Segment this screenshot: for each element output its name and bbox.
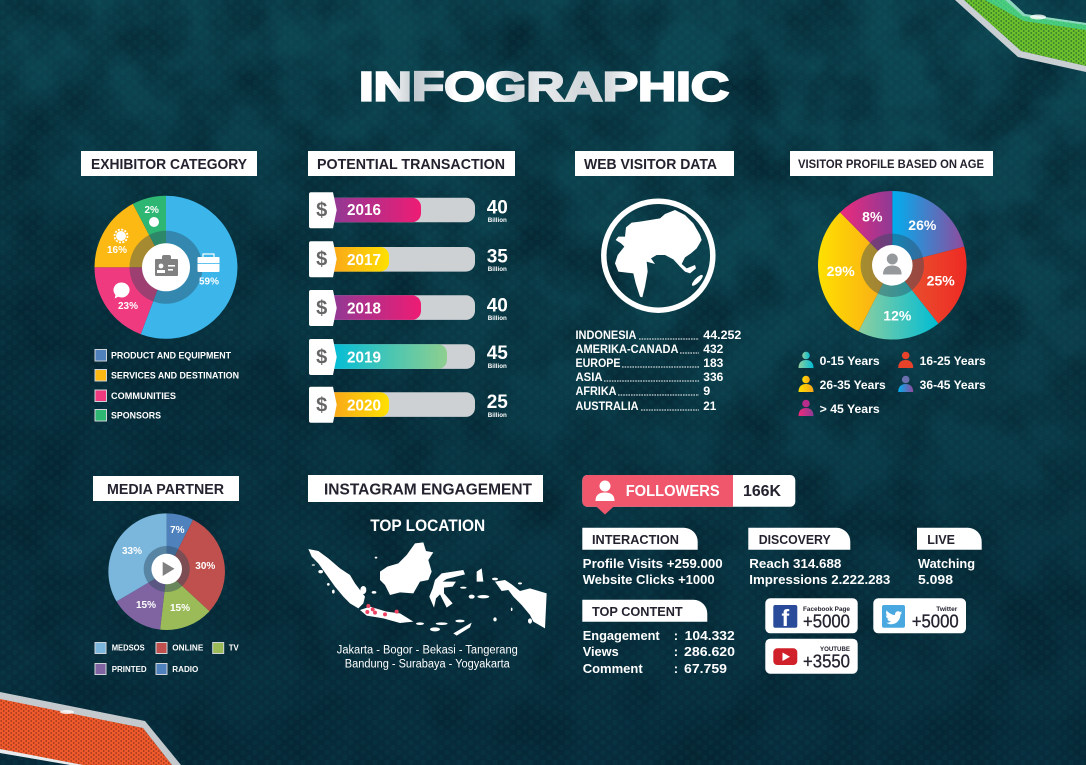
labels: 15% bbox=[136, 600, 156, 611]
card: facebook: Facebook Page bbox=[803, 606, 850, 613]
icon: user bbox=[883, 254, 902, 274]
heading: EXHIBITOR CATEGORY bbox=[91, 156, 247, 173]
legend item over 45: > 45 Years bbox=[820, 402, 880, 416]
table: visitors by region: ASIA bbox=[576, 370, 603, 384]
legend: SPONSORS bbox=[111, 410, 161, 420]
panel: visitor profile by age bbox=[790, 151, 993, 416]
icon: play bbox=[163, 562, 174, 576]
section: discovery: Reach 314.688 bbox=[749, 556, 841, 571]
section: top content: : bbox=[674, 661, 678, 676]
heading bbox=[81, 151, 257, 176]
panel: exhibitor category bbox=[81, 151, 257, 421]
bar 2019 bbox=[309, 339, 508, 375]
section: discovery: Impressions 2.222.283 bbox=[749, 572, 890, 587]
legend item 0-15 bbox=[798, 352, 880, 368]
table: visitors by region: 432 bbox=[703, 342, 724, 356]
heading: MEDIA PARTNER bbox=[107, 481, 224, 498]
followers badge: 166K bbox=[743, 483, 781, 500]
legend: SERVICES AND DESTINATION bbox=[111, 370, 239, 380]
bar 2020: 2020 bbox=[347, 398, 381, 414]
bar 2019: Billion bbox=[488, 363, 507, 370]
bar 2020: Billion bbox=[488, 412, 507, 419]
bar 2016: Billion bbox=[488, 217, 507, 224]
section: interaction: Profile Visits +259.000 bbox=[583, 556, 723, 571]
legend item 36-45 bbox=[898, 376, 986, 392]
icon: facebook: f bbox=[781, 605, 789, 631]
bar 2016: 2016 bbox=[347, 202, 381, 219]
followers badge: FOLLOWERS bbox=[626, 483, 720, 500]
legend: PRODUCT AND EQUIPMENT bbox=[111, 350, 231, 360]
section: top content: 104.332 bbox=[685, 628, 735, 643]
table: visitors by region: 44.252 bbox=[703, 328, 742, 342]
heading: VISITOR PROFILE BASED ON AGE bbox=[798, 157, 984, 171]
labels: 29% bbox=[827, 263, 855, 279]
subheading: top location: TOP LOCATION bbox=[370, 517, 485, 535]
table: visitors by region: AUSTRALIA bbox=[576, 399, 639, 413]
panel: potential transaction bbox=[308, 151, 515, 423]
legend: RADIO bbox=[172, 665, 198, 674]
icon: small pie bbox=[149, 217, 159, 227]
icon: gear bbox=[114, 230, 128, 242]
legend item 26-35 bbox=[798, 376, 886, 392]
legend bbox=[798, 352, 986, 416]
bar 2016 bbox=[309, 192, 508, 228]
labels bbox=[122, 525, 215, 614]
table: visitors by region: INDONESIA bbox=[576, 328, 637, 342]
section: live bbox=[917, 528, 982, 587]
section: interaction bbox=[582, 528, 723, 587]
panel: web visitor data bbox=[575, 151, 742, 413]
table: visitors by region: 21 bbox=[703, 399, 717, 413]
corner accent: orange bottom left bbox=[0, 692, 181, 765]
icon: user bbox=[596, 480, 614, 501]
section: top content: 67.759 bbox=[684, 661, 727, 676]
bar 2019: $ bbox=[316, 346, 327, 368]
card: twitter bbox=[873, 598, 966, 633]
bar 2018: 40 bbox=[487, 296, 508, 316]
panel: instagram engagement bbox=[308, 475, 547, 670]
bar 2018: Billion bbox=[488, 315, 507, 322]
cities list: Bandung - Surabaya - Yogyakarta bbox=[345, 658, 510, 670]
labels: 7% bbox=[170, 525, 185, 536]
section: discovery: DISCOVERY bbox=[759, 532, 831, 547]
bar 2017 bbox=[309, 241, 508, 277]
bar 2020: 25 bbox=[487, 392, 508, 413]
legend item over 45 bbox=[798, 400, 880, 416]
labels: 15% bbox=[170, 603, 190, 614]
card: twitter: +5000 bbox=[912, 612, 959, 632]
cities list: Jakarta - Bogor - Bekasi - Tangerang bbox=[337, 644, 518, 656]
bar 2017: $ bbox=[316, 248, 327, 270]
pie chart bbox=[108, 513, 225, 630]
card: youtube: +3550 bbox=[803, 652, 850, 672]
labels: 26% bbox=[908, 217, 937, 233]
followers badge bbox=[582, 475, 795, 514]
icon: twitter bbox=[882, 605, 905, 628]
labels: 8% bbox=[862, 209, 883, 225]
title: INFOGRAPHIC bbox=[359, 64, 729, 110]
legend item 16-25 bbox=[898, 352, 986, 368]
table: visitors by region: AMERIKA-CANADA bbox=[576, 342, 679, 356]
section: top content: TOP CONTENT bbox=[592, 604, 683, 619]
bar 2018: $ bbox=[316, 298, 327, 320]
cities list bbox=[337, 644, 518, 670]
table: visitors by region: 336 bbox=[703, 370, 724, 384]
legend: COMMUNITIES bbox=[111, 391, 176, 401]
bar 2017: Billion bbox=[488, 266, 507, 273]
heading bbox=[790, 151, 993, 176]
legend item 36-45: 36-45 Years bbox=[920, 378, 986, 392]
bar 2020: $ bbox=[316, 394, 327, 416]
table: visitors by region bbox=[576, 328, 742, 413]
section: discovery bbox=[748, 528, 890, 587]
card: twitter: Twitter bbox=[936, 606, 958, 613]
legend bbox=[95, 350, 239, 421]
legend: TV bbox=[229, 644, 239, 652]
card: youtube bbox=[765, 639, 858, 674]
section: top content: Engagement bbox=[583, 628, 660, 643]
label 16%: 16% bbox=[107, 245, 127, 256]
section: live: 5.098 bbox=[918, 572, 953, 587]
icon: id badge bbox=[155, 255, 178, 276]
panel: media partner bbox=[93, 476, 239, 674]
donut chart bbox=[94, 196, 237, 339]
section: live: LIVE bbox=[927, 532, 955, 547]
corner accent: green top right bbox=[955, 0, 1086, 72]
card: youtube: YOUTUBE bbox=[820, 647, 850, 653]
bar 2017: 2017 bbox=[347, 252, 381, 269]
icon: chat bubble bbox=[113, 282, 130, 298]
section: top content bbox=[582, 600, 735, 676]
legend: MEDSOS bbox=[112, 644, 145, 652]
section: top content: : bbox=[674, 644, 678, 659]
bar 2016: $ bbox=[316, 200, 327, 222]
label 59%: 59% bbox=[199, 276, 219, 288]
bar 2017: 35 bbox=[487, 246, 508, 268]
section: live: Watching bbox=[918, 556, 975, 571]
heading bbox=[308, 475, 543, 502]
heading: POTENTIAL TRANSACTION bbox=[317, 156, 505, 173]
section: interaction: Website Clicks +1000 bbox=[583, 572, 715, 587]
labels bbox=[827, 209, 955, 324]
labels: 30% bbox=[195, 561, 215, 572]
table: visitors by region: 183 bbox=[703, 356, 724, 370]
heading bbox=[575, 151, 734, 176]
heading: WEB VISITOR DATA bbox=[584, 156, 717, 173]
bar 2020 bbox=[309, 387, 508, 423]
legend item 0-15: 0-15 Years bbox=[820, 354, 880, 368]
section: top content: 286.620 bbox=[684, 644, 735, 659]
section: interaction: INTERACTION bbox=[592, 532, 679, 547]
section: top content: : bbox=[674, 628, 678, 643]
heading: INSTAGRAM ENGAGEMENT bbox=[324, 482, 532, 498]
labels: 25% bbox=[927, 273, 955, 289]
table: visitors by region: 9 bbox=[703, 384, 711, 398]
icon: briefcase bbox=[198, 254, 220, 272]
bar 2016: 40 bbox=[487, 198, 508, 218]
pie chart bbox=[818, 191, 967, 340]
bar 2018: 2018 bbox=[347, 300, 381, 318]
legend item 26-35: 26-35 Years bbox=[820, 378, 886, 392]
legend item 16-25: 16-25 Years bbox=[920, 354, 986, 368]
panel: followers and engagement stats bbox=[582, 475, 982, 676]
icon: location pins bbox=[365, 604, 399, 616]
legend bbox=[95, 642, 239, 674]
map: indonesia bbox=[308, 542, 547, 636]
labels: 33% bbox=[122, 546, 142, 557]
icon: globe bbox=[604, 201, 713, 310]
icon: youtube bbox=[773, 648, 797, 665]
section: top content: Comment bbox=[583, 661, 643, 676]
table: visitors by region: EUROPE bbox=[576, 356, 620, 370]
card: facebook: +5000 bbox=[803, 612, 850, 632]
legend: ONLINE bbox=[172, 644, 204, 652]
card: facebook bbox=[765, 598, 858, 633]
heading bbox=[93, 476, 239, 501]
bar 2018 bbox=[309, 290, 508, 326]
label 2%: 2% bbox=[144, 205, 159, 216]
labels: 12% bbox=[883, 308, 912, 324]
legend: PRINTED bbox=[112, 665, 147, 674]
heading bbox=[308, 151, 515, 176]
label 23%: 23% bbox=[118, 301, 138, 312]
table: visitors by region: AFRIKA bbox=[576, 384, 617, 398]
section: top content: Views bbox=[583, 644, 619, 659]
bar 2019: 45 bbox=[487, 343, 508, 364]
bar 2019: 2019 bbox=[347, 350, 381, 366]
